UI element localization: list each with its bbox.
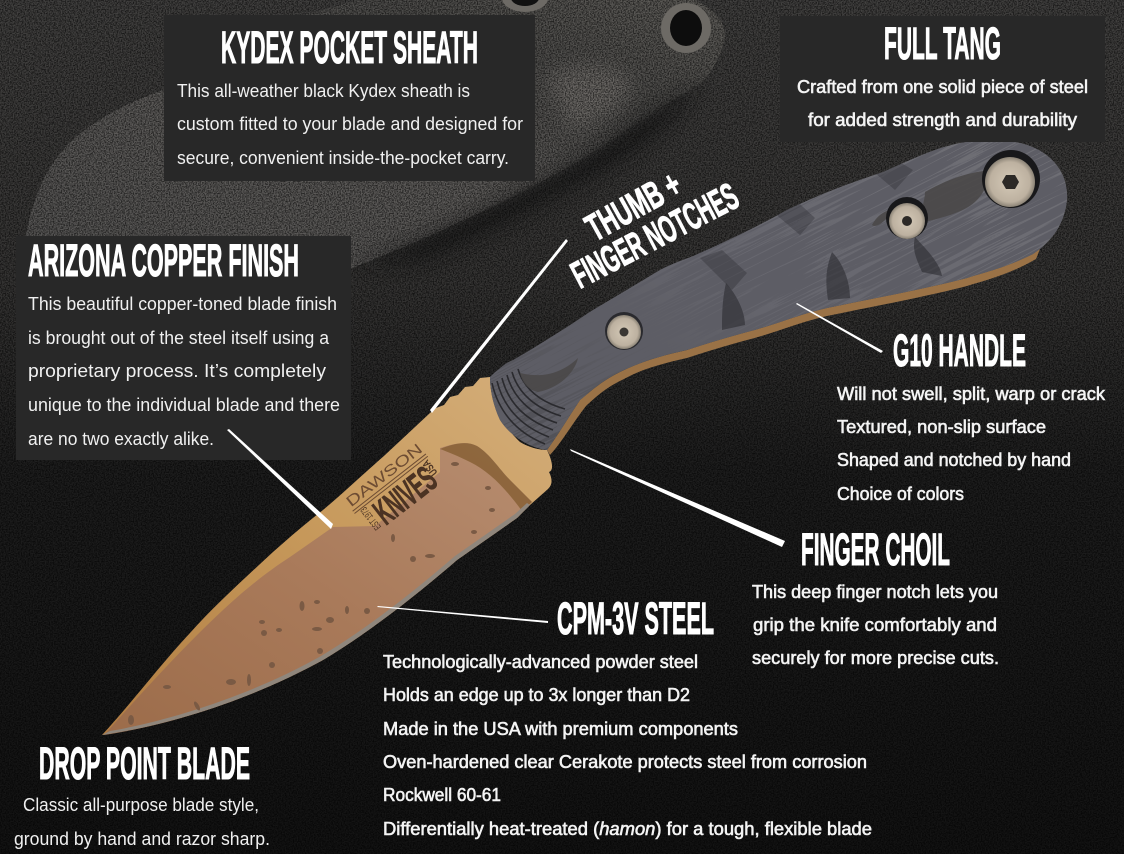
panel: full tang: [780, 16, 1105, 142]
callout: finger choil: FINGER CHOIL: [801, 524, 950, 575]
text block: g10 handle list: [837, 384, 1106, 504]
panel: arizona copper finish: ARIZONA COPPER FINISH: [28, 235, 299, 286]
callout: cpm-3v steel: [383, 593, 872, 839]
text block: cpm-3v steel list: Differentially heat-treated (hamon) for a tough, flexible blade: [383, 819, 872, 839]
text block: drop point description: [14, 795, 270, 849]
heading: thumb and finger notches: THUMB +: [579, 164, 689, 250]
blade logo: DAWSON: [343, 441, 426, 511]
blade logo: [342, 440, 451, 543]
text block: cpm-3v steel list: Technologically-advanced powder steel: [383, 652, 698, 672]
callout: cpm-3v steel: CPM-3V STEEL: [557, 593, 714, 644]
icon: handle screw medium: [886, 197, 928, 239]
text block: arizona description: This beautiful copper-toned blade finish: [28, 294, 337, 314]
handle notches: [700, 158, 942, 330]
blade logo: KNIVES: [365, 458, 444, 532]
text block: g10 handle list: Textured, non-slip surface: [837, 417, 1046, 437]
panel: kydex pocket sheath: KYDEX POCKET SHEATH: [221, 22, 478, 73]
text block: drop point description: Classic all-purpose blade style,: [23, 795, 259, 815]
text block: arizona description: [28, 294, 340, 449]
text block: finger choil description: [752, 582, 999, 668]
arrow: g10 handle pointer: [796, 303, 883, 353]
text block: finger choil description: This deep finger notch lets you: [752, 582, 998, 602]
callout: drop point blade: [14, 738, 270, 849]
panel: arizona copper finish: [16, 235, 351, 460]
text block: cpm-3v steel list: Rockwell 60-61: [383, 785, 501, 805]
text block: finger choil description: securely for more precise cuts.: [752, 648, 999, 668]
callout: finger choil: [752, 524, 999, 668]
knife: [102, 142, 1068, 735]
handle scales: [490, 142, 1068, 455]
guard-end concentric arcs: [492, 369, 565, 444]
icon: sheath eyelets: [502, 0, 711, 53]
text block: drop point description: ground by hand and razor sharp.: [14, 829, 270, 849]
text block: arizona description: is brought out of the steel itself using a: [28, 328, 330, 348]
arrow: cpm-3v steel pointer: [377, 606, 548, 623]
text block: kydex description: secure, convenient inside-the-pocket carry.: [177, 148, 509, 168]
text block: full tang description: [797, 77, 1088, 130]
heading: thumb and finger notches: [565, 164, 746, 297]
text block: kydex description: [177, 81, 523, 168]
panel: kydex pocket sheath: [164, 15, 535, 181]
text block: full tang description: Crafted from one solid piece of steel: [797, 77, 1088, 97]
handle G10 contour pattern: [490, 142, 1068, 450]
kydex sheath: [23, 0, 725, 268]
callout: g10 handle: [837, 325, 1106, 504]
text block: cpm-3v steel list: Holds an edge up to 3x longer than D2: [383, 685, 690, 705]
text block: finger choil description: grip the knife comfortably and: [753, 615, 997, 635]
text block: full tang description: for added strength and durability: [808, 110, 1077, 130]
callout: drop point blade: DROP POINT BLADE: [39, 738, 250, 789]
text block: kydex description: This all-weather black Kydex sheath is: [177, 81, 470, 101]
text block: g10 handle list: Shaped and notched by hand: [837, 450, 1071, 470]
heading: thumb and finger notches: FINGER NOTCHES: [565, 176, 746, 297]
blade logo: USA: [420, 457, 440, 478]
text block: arizona description: proprietary process. It’s completely: [28, 361, 326, 381]
icon: handle screw large: [982, 150, 1040, 208]
arrow: finger choil pointer: [570, 449, 785, 547]
text block: cpm-3v steel list: Made in the USA with premium components: [383, 719, 738, 739]
blade pitting spots: [128, 462, 495, 725]
text block: arizona description: are no two exactly alike.: [28, 429, 214, 449]
text block: cpm-3v steel list: [383, 652, 872, 839]
arrow: arizona copper finish pointer: [227, 429, 333, 529]
text block: g10 handle list: Will not swell, split, warp or crack: [837, 384, 1106, 404]
blade logo: EST 1973: [359, 504, 384, 532]
icon: handle screw small: [605, 312, 643, 350]
text block: kydex description: custom fitted to your blade and designed for: [177, 114, 523, 134]
text block: arizona description: unique to the individual blade and there: [28, 395, 340, 415]
text block: cpm-3v steel list: Oven-hardened clear Cerakote protects steel from corrosion: [383, 752, 867, 772]
arrow: thumb notches pointer: [430, 239, 568, 413]
blade: [102, 377, 552, 735]
text block: g10 handle list: Choice of colors: [837, 484, 964, 504]
